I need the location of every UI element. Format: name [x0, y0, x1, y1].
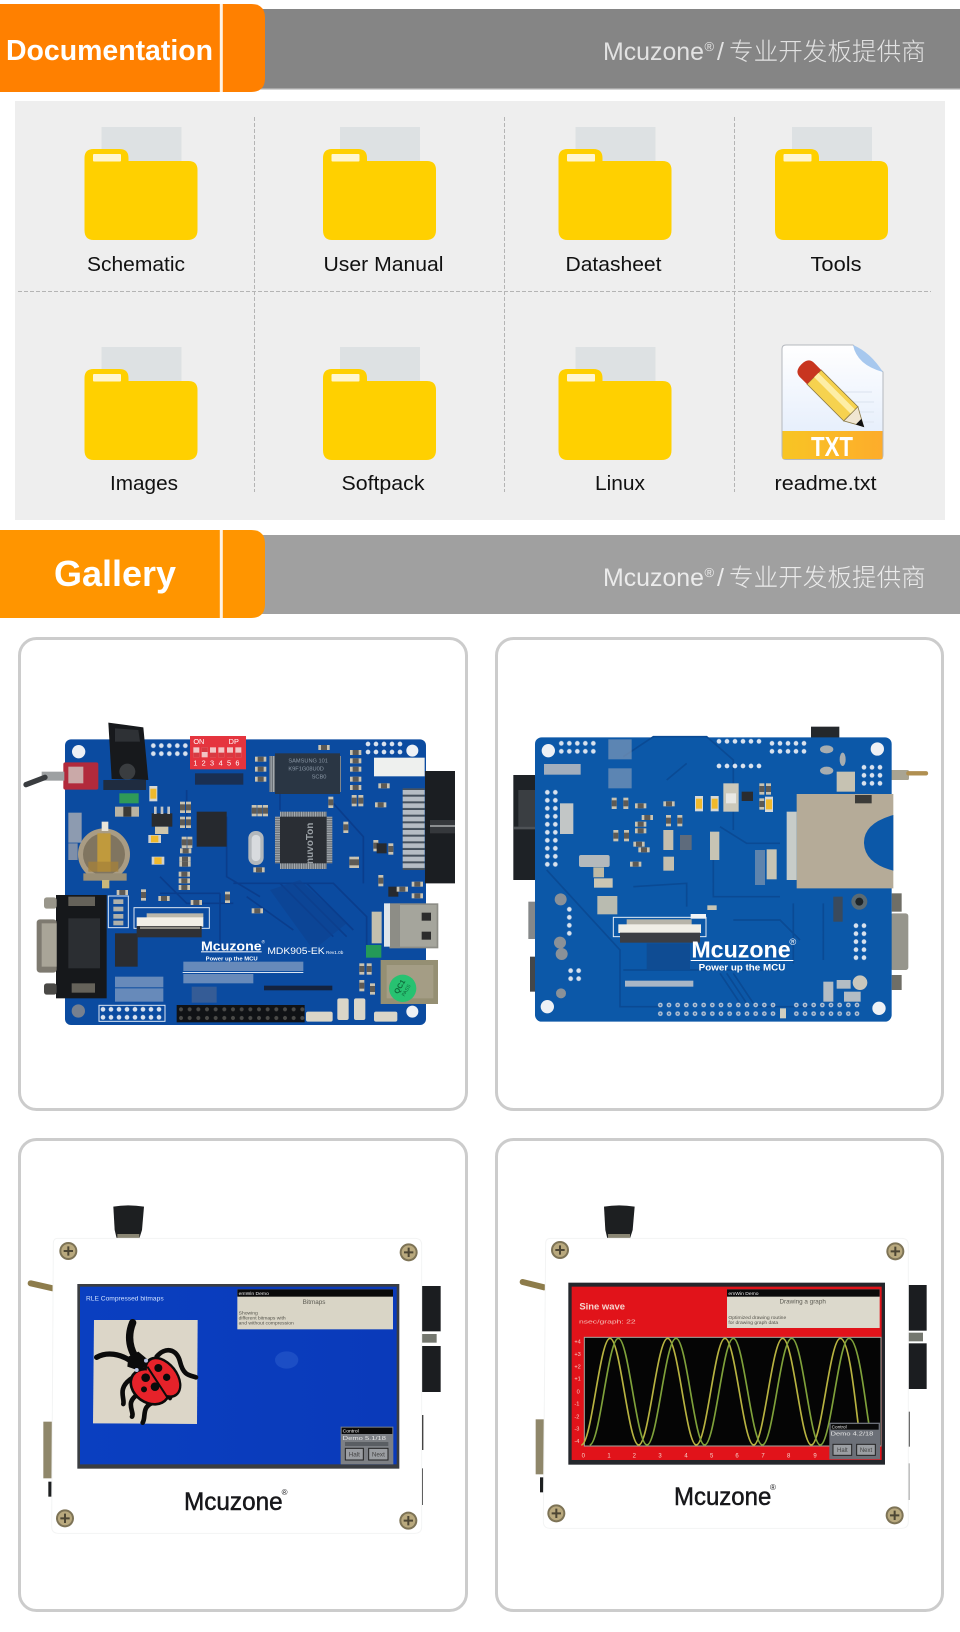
- header: Gallery: [0, 530, 960, 618]
- silkscreen logo: MDK905-EK: [267, 946, 325, 956]
- LCD screen: RLE Compressed bitmaps: [86, 1296, 164, 1303]
- DIP switch: [190, 736, 246, 769]
- IDC connector: [425, 771, 455, 883]
- small components: [117, 745, 423, 995]
- printed brand: Mcuzone: [674, 1483, 771, 1511]
- panel: gallery card, board top view: [20, 638, 466, 1110]
- silkscreen logo: ®: [789, 937, 796, 947]
- silkscreen logo: Power up the MCU: [699, 963, 785, 973]
- demo window: and without compression: [239, 1320, 294, 1326]
- demo window: Showing: [239, 1310, 258, 1316]
- demo window: [237, 1289, 393, 1329]
- folder: Schematic: Schematic: [87, 253, 185, 276]
- DIP switch: 3: [210, 759, 214, 768]
- sine graph: 8: [787, 1453, 791, 1459]
- folder: Tools: Tools: [810, 253, 862, 276]
- LCD screen: [77, 1284, 399, 1469]
- silkscreen logo: Power up the MCU: [206, 957, 258, 963]
- folder: Softpack: Softpack: [342, 472, 425, 495]
- demo window: different bitmaps with: [239, 1315, 286, 1321]
- demo window: Optimized drawing routine: [728, 1315, 786, 1321]
- DIP switch: 6: [235, 759, 239, 768]
- control window: Demo 4.2/18: [831, 1431, 873, 1437]
- sine graph: -4: [574, 1439, 579, 1445]
- demo window: emWin Demo: [728, 1291, 759, 1297]
- heading: Gallery: Gallery: [54, 553, 176, 594]
- printed brand: ®: [282, 1488, 288, 1497]
- sine graph: -1: [574, 1402, 579, 1408]
- DC jack: [108, 723, 148, 780]
- sine graph: 4: [684, 1453, 688, 1459]
- DIP switch: 2: [202, 759, 206, 768]
- panel: gallery card, LCD sine wave demo: [496, 1140, 942, 1610]
- folder: Linux: Linux: [595, 472, 646, 495]
- heading: Documentation: Documentation: [6, 35, 213, 67]
- SD card slot: [787, 794, 893, 888]
- sine graph: -3: [574, 1427, 579, 1433]
- photo: LCD board with ladybug: [31, 1205, 441, 1533]
- folder: Softpack: [323, 347, 436, 495]
- LCD screen: Sine wave: [579, 1301, 625, 1311]
- sine graph: 0: [582, 1453, 586, 1459]
- panel: gallery card, LCD bitmap demo: [20, 1140, 466, 1610]
- demo window: [727, 1289, 880, 1328]
- sine graph: +3: [574, 1352, 581, 1358]
- silkscreen logo: [691, 936, 796, 973]
- printed brand: ®: [770, 1483, 776, 1492]
- DIP switch: DP: [229, 737, 239, 746]
- folder: Images: Images: [110, 472, 178, 495]
- sine graph: 5: [710, 1453, 714, 1459]
- USB socket: [384, 903, 438, 948]
- flash chip: SCB0: [312, 775, 326, 781]
- folder: Linux: [558, 347, 672, 495]
- LCD screen: [568, 1283, 885, 1465]
- sine graph: 0: [577, 1389, 580, 1395]
- DB9 serial connector: [37, 895, 107, 998]
- flash chip: SAMSUNG 101: [288, 759, 328, 765]
- sine graph: +4: [574, 1340, 581, 1346]
- brand tagline: Mcuzone: [603, 38, 704, 66]
- sine graph: [574, 1337, 881, 1459]
- demo window: for drawing graph data: [728, 1320, 778, 1326]
- brand tagline: 专业开发板提供商: [729, 32, 926, 68]
- header: Documentation: [0, 4, 960, 92]
- DIP switch: 5: [227, 759, 231, 768]
- folder: Tools: [775, 127, 888, 276]
- silkscreen logo: [201, 938, 344, 963]
- DIP switch: 1: [193, 759, 197, 768]
- demo window: emWin Demo: [239, 1291, 269, 1297]
- ethernet socket: [381, 960, 438, 1004]
- icon: readme.txt file: [782, 345, 883, 462]
- flash chip: [269, 753, 341, 794]
- DIP switch: ON: [193, 737, 204, 746]
- label: readme.txt: readme.txt: [774, 472, 877, 495]
- control window: Halt: [837, 1448, 848, 1454]
- ethernet socket: PASS: [401, 983, 413, 998]
- sine graph: 9: [813, 1453, 817, 1459]
- MCU: [275, 812, 332, 869]
- control window: [829, 1423, 880, 1459]
- brand tagline: /: [717, 564, 724, 592]
- control window: Next: [372, 1452, 385, 1459]
- control window: Next: [860, 1448, 872, 1454]
- folder: Images: [84, 347, 198, 495]
- folder: User Manual: User Manual: [324, 253, 444, 276]
- ladybug bitmap: [93, 1320, 198, 1424]
- folder: User Manual: [323, 127, 444, 276]
- black pin header: [177, 1005, 305, 1022]
- brand tagline: ®: [704, 565, 714, 580]
- control window: Demo 5.1/18: [343, 1436, 386, 1442]
- brand tagline: ®: [704, 39, 714, 54]
- MCU: nuvoTon: [305, 823, 316, 864]
- sine graph: 2: [633, 1453, 637, 1459]
- control window: [341, 1427, 393, 1464]
- icon: readme.txt file: TXT: [811, 431, 853, 462]
- FPC connector: [134, 908, 209, 937]
- flash chip: K9F1G08U0D: [288, 767, 324, 773]
- photo: LCD board with sine graph: [523, 1205, 927, 1528]
- sine graph: +1: [574, 1377, 581, 1383]
- panel: documentation folders: [15, 101, 945, 520]
- sine graph: +2: [574, 1364, 581, 1370]
- silkscreen logo: Mcuzone: [201, 940, 262, 954]
- silkscreen logo: Mcuzone: [691, 936, 791, 962]
- sine graph: 7: [761, 1453, 765, 1459]
- photo: PCB top side: [26, 723, 455, 1025]
- FPC connector: [613, 914, 706, 943]
- brand tagline: 专业开发板提供商: [729, 558, 926, 594]
- control window: Control: [832, 1425, 847, 1430]
- demo window: Drawing a graph: [779, 1299, 826, 1306]
- panel: gallery card, board bottom view: [496, 638, 942, 1110]
- coin cell holder: [78, 822, 130, 888]
- folder: Schematic: [84, 127, 198, 276]
- sine graph: 6: [735, 1453, 739, 1459]
- DIP switch: 4: [219, 759, 223, 768]
- folder: Datasheet: [558, 127, 672, 276]
- folder: Datasheet: Datasheet: [566, 253, 662, 276]
- control window: Halt: [349, 1452, 360, 1459]
- toggle switch: [26, 762, 98, 790]
- sine graph: 1: [607, 1453, 611, 1459]
- silkscreen logo: ®: [262, 938, 266, 944]
- demo window: Bitmaps: [303, 1299, 325, 1306]
- printed brand: Mcuzone: [184, 1488, 283, 1516]
- brand tagline: /: [717, 38, 724, 66]
- control window: Control: [343, 1429, 359, 1435]
- silkscreen logo: Rev1.0b: [326, 950, 344, 955]
- photo: PCB bottom side: [513, 727, 926, 1022]
- ethernet socket: QC1: [392, 978, 407, 995]
- LCD screen: nsec/graph: 22: [579, 1319, 636, 1325]
- sine graph: 3: [658, 1453, 662, 1459]
- brand tagline: Mcuzone: [603, 564, 704, 592]
- sine graph: -2: [574, 1414, 579, 1420]
